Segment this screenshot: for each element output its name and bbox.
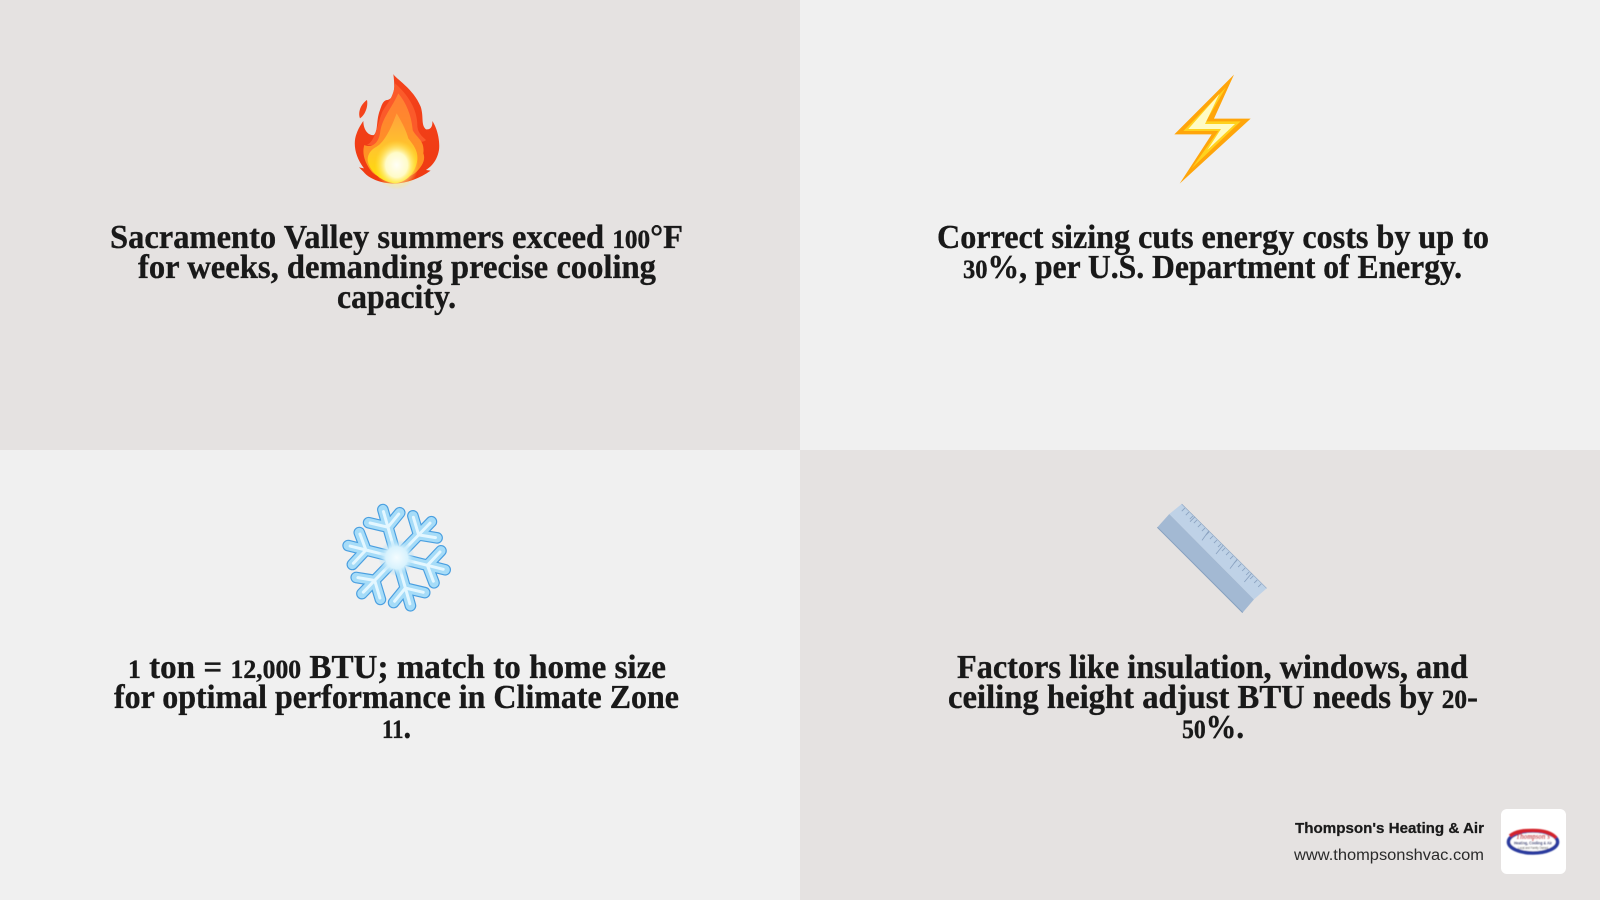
icon: snowflake [344, 505, 449, 610]
website: www.thompsonshvac.com [1293, 847, 1484, 864]
logo badge: Local and Family Owned [1518, 846, 1548, 850]
panel: summer heat: for weeks, demanding precise cooling [138, 249, 656, 286]
panel: energy savings: 30%, per U.S. Department of Energy. [963, 249, 1462, 286]
text: adjustment factors: Factors like insulation, windows, and [957, 649, 1468, 686]
logo badge: Thompson's [1516, 832, 1550, 841]
panel: energy savings [800, 0, 1600, 450]
icon: fire [355, 74, 439, 190]
panel: tonnage: 11. [382, 709, 411, 746]
logo badge [1501, 809, 1566, 874]
panel: summer heat [0, 0, 800, 450]
icon: ruler [1157, 504, 1267, 613]
panel: adjustment factors: 50%. [1182, 709, 1244, 746]
panel: summer heat: capacity. [337, 279, 456, 316]
brand name: Thompson's Heating & Air [1295, 820, 1484, 837]
icon: lightning bolt [1174, 75, 1251, 184]
panel: tonnage: for optimal performance in Climate Zone [114, 679, 679, 716]
text: tonnage: 1 ton = 12,000 BTU; match to home size [128, 649, 666, 686]
panel: adjustment factors: ceiling height adjust BTU needs by 20- [948, 679, 1478, 716]
logo badge: Heating, Cooling & Air [1514, 840, 1552, 846]
text: energy savings: Correct sizing cuts energy costs by up to [937, 219, 1489, 256]
panel: adjustment factors [800, 450, 1600, 900]
text: summer heat: Sacramento Valley summers exceed 100°F [110, 219, 683, 256]
panel: tonnage [0, 450, 800, 900]
